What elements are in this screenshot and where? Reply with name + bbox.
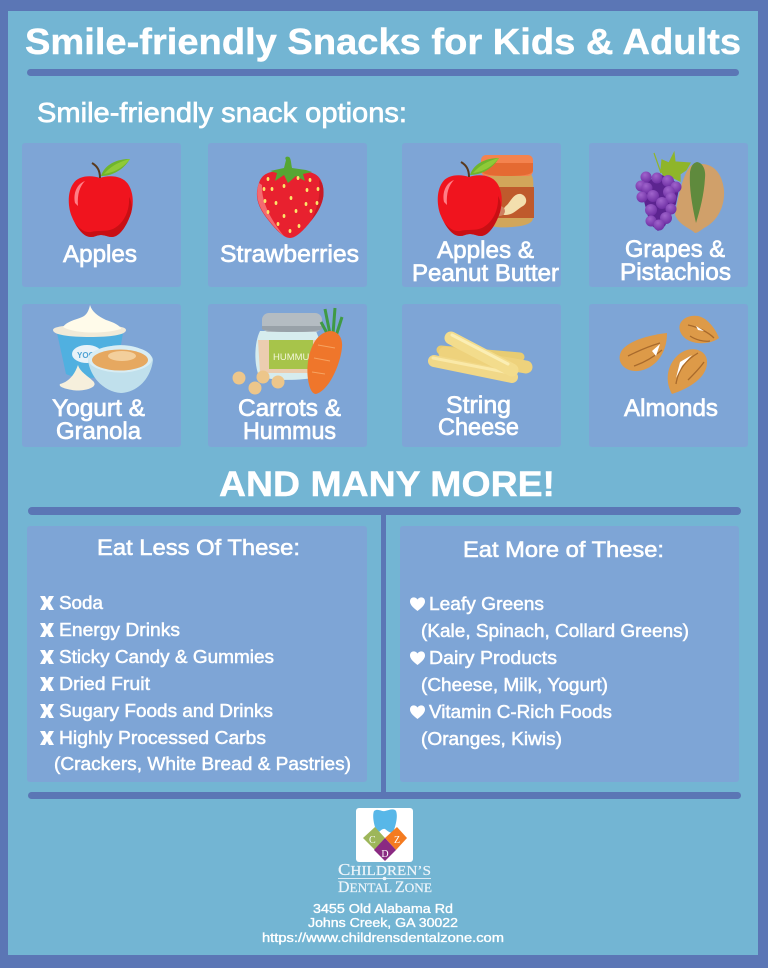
panel: yogurt and granola bbox=[22, 304, 181, 447]
icon: tooth bbox=[373, 809, 397, 833]
list: eat more items: Leafy Greens bbox=[429, 593, 544, 614]
icon: hummus jar: HUMMUS bbox=[273, 352, 316, 363]
label: grapes and pistachios: Grapes & bbox=[625, 236, 725, 263]
panel: apples and peanut butter bbox=[402, 143, 561, 287]
list: eat more items: (Cheese, Milk, Yogurt) bbox=[421, 674, 608, 695]
list: eat less items: Energy Drinks bbox=[59, 619, 180, 640]
list: eat less items: Dried Fruit bbox=[59, 673, 150, 694]
title: Smile-friendly Snacks for Kids & Adults bbox=[25, 21, 741, 62]
panel: string cheese bbox=[402, 304, 561, 447]
icon: puzzle diamond bbox=[363, 827, 407, 861]
panel: apples bbox=[22, 143, 181, 287]
panel: almonds bbox=[589, 304, 748, 447]
list: eat more items: Vitamin C-Rich Foods bbox=[429, 701, 612, 722]
icon: strawberry bbox=[257, 157, 324, 238]
list: eat more items: Dairy Products bbox=[429, 647, 557, 668]
heading: and many more: AND MANY MORE! bbox=[219, 465, 555, 504]
list: eat less items: (Crackers, White Bread & Pastries) bbox=[54, 753, 351, 774]
icon: puzzle diamond: D bbox=[381, 849, 389, 860]
panel: grapes and pistachios bbox=[589, 143, 748, 287]
logo wordmark: CHILDREN’S bbox=[338, 860, 431, 879]
icon: carrot bbox=[307, 308, 342, 394]
label: carrots and hummus bbox=[238, 395, 341, 445]
label: apples and peanut butter bbox=[412, 237, 559, 287]
panel: carrots and hummus bbox=[208, 304, 367, 447]
panel: strawberries bbox=[208, 143, 367, 287]
icon: apple on jar bbox=[438, 158, 502, 236]
logo wordmark: DENTAL ZONE bbox=[338, 879, 432, 896]
address block bbox=[262, 901, 504, 945]
icon: almonds bbox=[620, 316, 719, 394]
icon: pistachio bbox=[675, 162, 724, 233]
label: apples and peanut butter: Apples & bbox=[437, 237, 534, 264]
icon: yogurt cup: YOG bbox=[77, 351, 95, 360]
label: string cheese bbox=[438, 392, 519, 441]
list: eat less items: Sticky Candy & Gummies bbox=[59, 646, 274, 667]
panel: eat more bbox=[400, 526, 739, 782]
heading: eat less: Eat Less Of These: bbox=[97, 535, 300, 560]
icon: grape leaves bbox=[654, 153, 690, 181]
list: eat less items bbox=[40, 592, 351, 774]
icon: string cheese bbox=[433, 335, 526, 377]
icon: puzzle diamond: Z bbox=[394, 835, 400, 846]
label: almonds: Almonds bbox=[624, 395, 718, 422]
label: string cheese: Cheese bbox=[438, 414, 519, 441]
heading: snack options: Smile-friendly snack options: bbox=[37, 97, 407, 128]
icon: peanut butter jar bbox=[481, 155, 534, 227]
address block: https://www.childrensdentalzone.com bbox=[262, 930, 504, 945]
icon: yogurt cup bbox=[53, 305, 126, 391]
label: grapes and pistachios bbox=[620, 236, 731, 286]
icon: chickpeas bbox=[232, 370, 284, 394]
icon: grapes bbox=[636, 172, 682, 231]
heading: eat more: Eat More of These: bbox=[463, 537, 664, 562]
list: eat more items: (Oranges, Kiwis) bbox=[421, 728, 562, 749]
icon: puzzle diamond: C bbox=[369, 835, 376, 846]
address block: Johns Creek, GA 30022 bbox=[308, 915, 458, 930]
list: eat less items: Highly Processed Carbs bbox=[59, 727, 266, 748]
label: carrots and hummus: Carrots & bbox=[238, 395, 341, 422]
address block: 3455 Old Alabama Rd bbox=[313, 901, 453, 916]
label: apples: Apples bbox=[63, 241, 137, 268]
icon: apple bbox=[69, 159, 133, 237]
icon: hummus jar bbox=[255, 313, 322, 380]
list: eat less items: Sugary Foods and Drinks bbox=[59, 700, 273, 721]
list: eat less items: Soda bbox=[59, 592, 104, 613]
list: eat more items: (Kale, Spinach, Collard Greens) bbox=[421, 620, 689, 641]
label: grapes and pistachios: Pistachios bbox=[620, 259, 731, 286]
logo wordmark bbox=[338, 860, 432, 896]
panel: eat less bbox=[27, 526, 367, 782]
label: yogurt and granola bbox=[52, 395, 145, 445]
label: yogurt and granola: Granola bbox=[56, 418, 142, 445]
label: strawberries: Strawberries bbox=[220, 241, 359, 268]
label: yogurt and granola: Yogurt & bbox=[52, 395, 145, 422]
list: eat more items bbox=[410, 593, 689, 749]
logo: children's dental zone bbox=[338, 808, 432, 896]
label: string cheese: String bbox=[446, 392, 511, 419]
icon: granola bowl bbox=[88, 345, 153, 393]
label: apples and peanut butter: Peanut Butter bbox=[412, 260, 559, 287]
label: carrots and hummus: Hummus bbox=[243, 418, 336, 445]
